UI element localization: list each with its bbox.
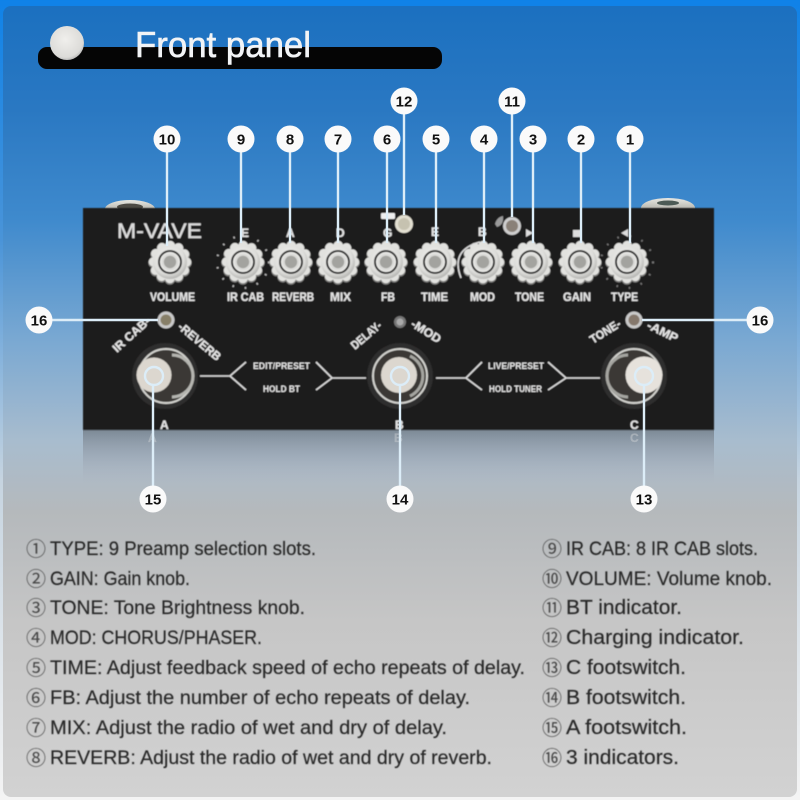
callout numbers: 1: [626, 132, 634, 148]
switch labels: -MOD: [408, 317, 444, 346]
callout numbers: 10: [159, 132, 175, 148]
legend: right column: ⑩: [542, 563, 562, 592]
function brackets: [200, 361, 600, 394]
legend: right column: ⑫: [542, 622, 562, 651]
callout numbers: 16: [31, 312, 47, 330]
legend: right column: B footswitch.: [566, 687, 686, 709]
legend: right column: ⑨: [542, 533, 562, 562]
callout numbers: 7: [334, 132, 342, 148]
title: Front panel: [135, 24, 311, 65]
function brackets: EDIT/PRESET: [253, 361, 310, 371]
callout numbers: 9: [237, 132, 245, 148]
callout numbers: 14: [392, 492, 409, 508]
legend: right column: 3 indicators.: [566, 747, 679, 769]
footswitch A: [132, 343, 198, 409]
switch labels: IR CAB-: [110, 314, 153, 355]
legend: right column: IR CAB: 8 IR CAB slots.: [566, 539, 758, 560]
function brackets: HOLD BT: [263, 384, 300, 394]
callout numbers: 12: [396, 94, 412, 110]
legend: right column: ⑯: [542, 742, 562, 771]
callout numbers: 15: [145, 492, 161, 508]
legend: right column: ⑮: [542, 712, 562, 741]
knob labels: TONE: [515, 290, 544, 304]
logo: M-VAVE: [117, 220, 202, 243]
legend: left column: TIME: Adjust feedback speed of echo repeats of delay.: [50, 658, 525, 679]
callout numbers: 4: [480, 132, 489, 148]
reflected letters: A: [148, 431, 157, 445]
switch labels: -REVERB: [175, 320, 224, 364]
legend: left column: ①: [26, 533, 46, 562]
top jacks: [105, 198, 695, 218]
reflected letters: B: [394, 431, 403, 445]
reflected letters: [148, 431, 639, 445]
knob labels: FB: [381, 290, 395, 304]
legend: right column: C footswitch.: [566, 657, 686, 679]
callout numbers: 6: [383, 132, 391, 148]
legend: left column: ⑦: [26, 712, 46, 741]
switch labels: A: [160, 418, 169, 432]
knob labels: VOLUME: [150, 290, 195, 304]
callout numbers: 2: [577, 132, 585, 148]
legend: right column: ⑪: [542, 592, 562, 621]
title bar: [38, 24, 442, 69]
legend: left column: MIX: Adjust the radio of wet and dry of delay.: [50, 718, 447, 739]
knob labels: MIX: [330, 290, 351, 304]
callout numbers: 16: [752, 312, 768, 330]
legend: left column: TONE: Tone Brightness knob.: [50, 598, 305, 619]
legend: left column: ⑧: [26, 742, 46, 771]
legend: left column: ②: [26, 563, 46, 592]
switch labels: B: [395, 418, 404, 432]
legend: left column: ③: [26, 592, 46, 621]
legend: left column: GAIN: Gain knob.: [50, 569, 190, 590]
knob labels: [150, 290, 638, 304]
icon: title ball: [50, 26, 84, 60]
panel: pedal body: [83, 208, 714, 432]
knob labels: MOD: [470, 290, 495, 304]
small marks above knobs: E: [241, 226, 249, 240]
callout numbers: 11: [504, 94, 520, 110]
callout leader lines: [39, 101, 760, 499]
callout numbers: 13: [636, 492, 652, 508]
callout numbers: 3: [529, 132, 537, 148]
callout numbers: [26, 88, 774, 512]
small marks above knobs: D: [336, 226, 345, 240]
legend: right column: BT indicator.: [566, 597, 682, 619]
knobs: [153, 236, 653, 288]
reflected letters: C: [630, 431, 639, 445]
small marks above knobs: E: [431, 225, 439, 239]
legend: right column: A footswitch.: [566, 717, 687, 739]
legend: left column: TYPE: 9 Preamp selection slots.: [50, 539, 316, 560]
legend: left column: MOD: CHORUS/PHASER.: [50, 628, 262, 649]
switch labels: -AMP: [645, 318, 680, 345]
function brackets: HOLD TUNER: [489, 384, 542, 394]
legend: right column: [542, 533, 772, 771]
legend: left column: [26, 533, 525, 771]
switch labels: [110, 314, 680, 432]
knob labels: TIME: [421, 290, 448, 304]
knob labels: GAIN: [563, 290, 591, 304]
indicators: [158, 215, 642, 328]
legend: right column: ⑬: [542, 652, 562, 681]
switch labels: TONE-: [587, 317, 623, 347]
callout numbers: 5: [432, 132, 440, 148]
switch labels: DELAY-: [348, 318, 385, 352]
reflection: [83, 430, 714, 485]
function brackets: LIVE/PRESET: [488, 361, 544, 371]
small marks above knobs: A: [286, 226, 295, 240]
switch labels: C: [630, 418, 639, 432]
small marks above knobs: [241, 213, 628, 240]
knob labels: REVERB: [272, 290, 314, 304]
legend: right column: VOLUME: Volume knob.: [566, 569, 772, 590]
knob labels: TYPE: [611, 290, 638, 304]
legend: left column: ⑥: [26, 682, 46, 711]
legend: left column: ⑤: [26, 652, 46, 681]
legend: left column: REVERB: Adjust the radio of wet and dry of reverb.: [50, 748, 492, 769]
legend: right column: ⑭: [542, 682, 562, 711]
legend: left column: FB: Adjust the number of echo repeats of delay.: [50, 688, 470, 709]
knob labels: IR CAB: [227, 290, 264, 304]
small marks above knobs: G: [383, 226, 392, 240]
small marks above knobs: B: [478, 225, 487, 239]
callout numbers: 8: [286, 132, 294, 148]
legend: left column: ④: [26, 622, 46, 651]
footswitch C: [601, 343, 667, 409]
footswitch B: [367, 343, 433, 409]
legend: right column: Charging indicator.: [566, 627, 744, 649]
